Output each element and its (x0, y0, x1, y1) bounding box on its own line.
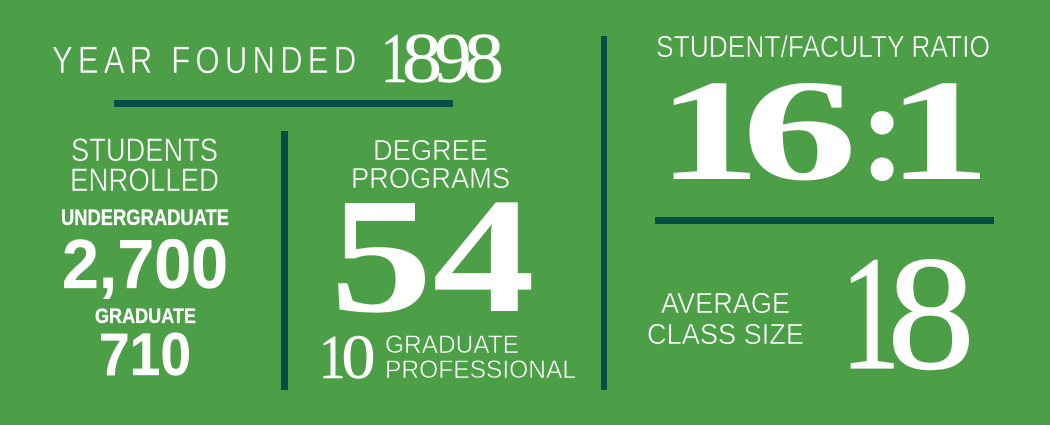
panel: average class size: 1 (840, 224, 900, 404)
panel: students enrolled (61, 132, 229, 388)
panel: students enrolled: 2,700 (62, 225, 228, 303)
heading: year founded: 8 (464, 20, 504, 98)
panel: student faculty ratio: : (859, 51, 906, 211)
heading: year founded (52, 20, 504, 98)
panel: students enrolled: STUDENTS (71, 132, 218, 168)
panel: student faculty ratio: STUDENT/FACULTY RATIO (656, 29, 990, 64)
divider: under year founded (114, 100, 453, 107)
panel: degree programs: DEGREE (373, 135, 488, 167)
divider: students and degrees (281, 131, 288, 390)
panel: average class size: CLASS SIZE (647, 319, 804, 351)
panel: average class size (647, 224, 975, 404)
panel: degree programs: 0 (342, 324, 376, 392)
panel: students enrolled: ENROLLED (70, 162, 219, 198)
divider: left and right columns (601, 36, 607, 390)
panel: degree programs: 54 (330, 164, 535, 347)
panel: students enrolled: 710 (99, 321, 191, 388)
panel: students enrolled: UNDERGRADUATE (61, 205, 229, 230)
panel: degree programs: 1 (319, 324, 345, 392)
heading: year founded: YEAR FOUNDED (52, 40, 356, 82)
heading: year founded: 9 (434, 20, 472, 98)
heading: year founded: 8 (402, 20, 442, 98)
panel: students enrolled: GRADUATE (95, 305, 196, 328)
panel: student faculty ratio: 1 (887, 51, 991, 211)
panel: degree programs: GRADUATE (385, 331, 519, 359)
panel: degree programs: PROGRAMS (351, 163, 510, 195)
panel: student faculty ratio: 6 (742, 51, 858, 211)
panel: degree programs (319, 135, 576, 392)
divider: ratio and class size (655, 217, 994, 224)
panel: average class size: 8 (887, 224, 975, 404)
panel: average class size: AVERAGE (661, 288, 790, 320)
panel: degree programs: PROFESSIONAL (385, 356, 576, 384)
heading: year founded: 1 (381, 20, 408, 98)
panel: student faculty ratio: 1 (657, 51, 761, 211)
panel: student faculty ratio (656, 29, 991, 211)
